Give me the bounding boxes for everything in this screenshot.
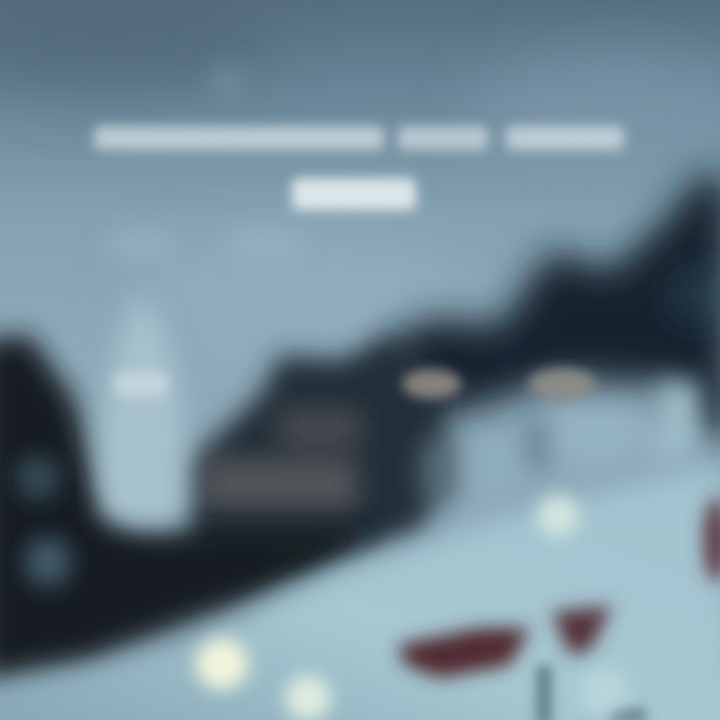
tree line: right xyxy=(390,175,720,440)
subtitle text block (blurred) xyxy=(110,68,300,252)
warm window glows xyxy=(402,368,596,400)
sky tonal variation xyxy=(0,0,720,340)
tree line: left xyxy=(0,335,380,680)
dark red shapes xyxy=(398,498,720,678)
pale tower xyxy=(101,295,182,520)
lights on the snow xyxy=(196,495,628,720)
pale buildings on right xyxy=(420,380,700,500)
tree line: centre xyxy=(190,335,450,580)
tower banner xyxy=(114,372,168,396)
snow slope xyxy=(0,465,720,720)
dark stroke lower right xyxy=(536,665,646,720)
title text block (blurred) xyxy=(94,126,624,210)
